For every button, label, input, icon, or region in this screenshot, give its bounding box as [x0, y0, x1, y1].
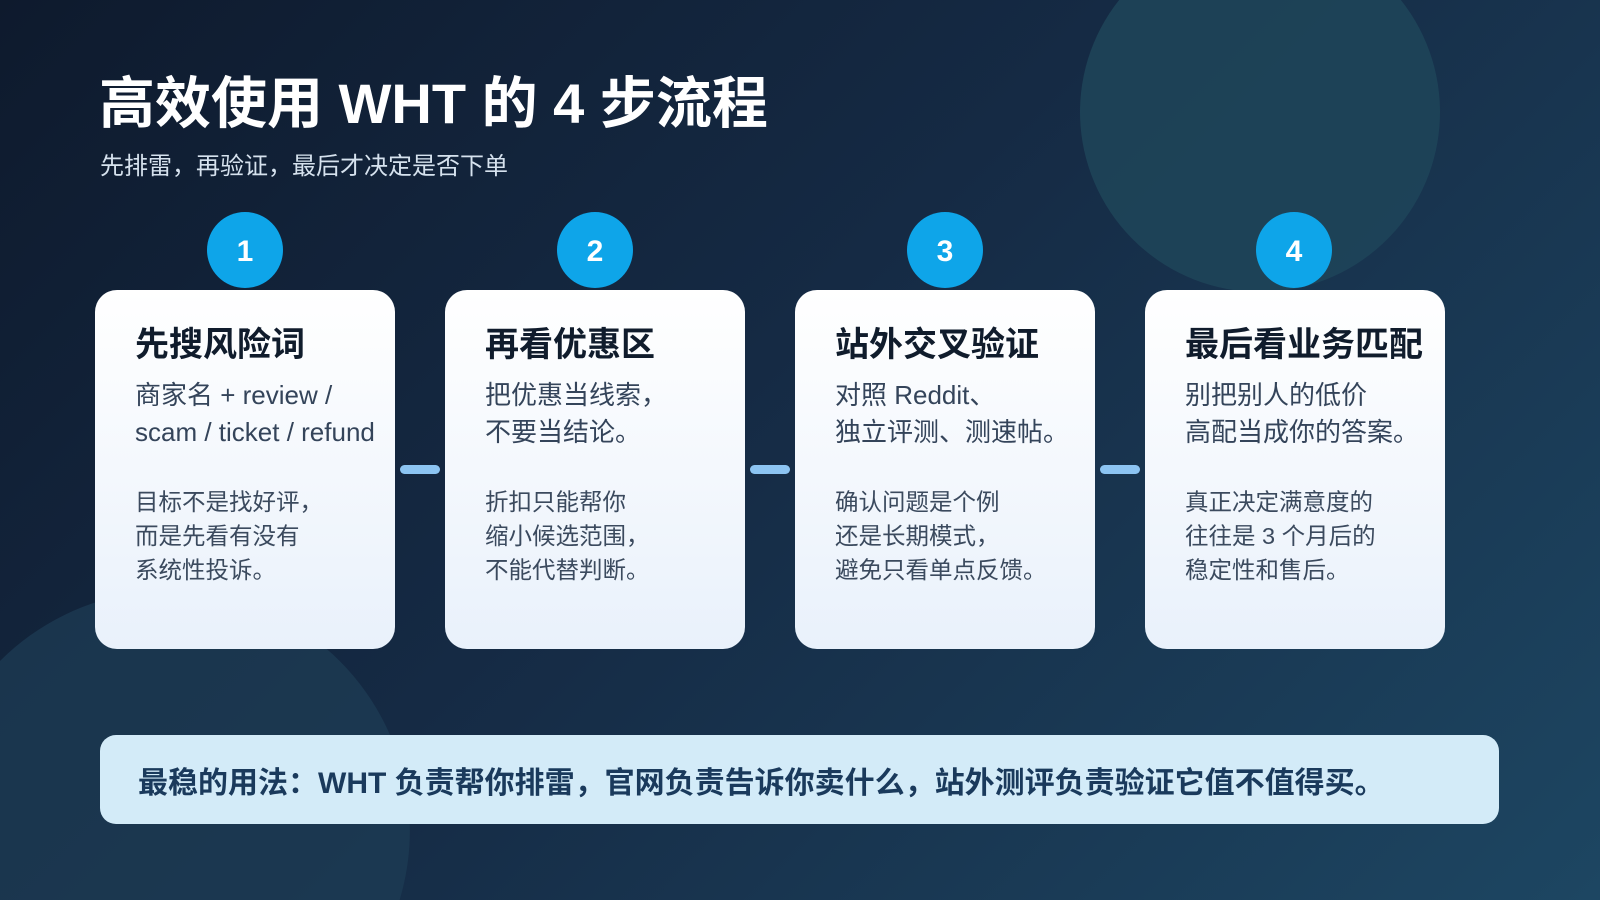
panel: step 1: 目标不是找好评，	[135, 489, 323, 515]
panel: step 2: 折扣只能帮你	[485, 489, 626, 515]
panel: step 1	[95, 290, 395, 649]
panel: step 1: 系统性投诉。	[135, 557, 276, 583]
panel: step 2: 缩小候选范围，	[485, 523, 650, 549]
panel: step 2: 不要当结论。	[485, 417, 641, 447]
badge 1	[207, 212, 283, 288]
badge 4	[1256, 212, 1332, 288]
panel: step 3: 站外交叉验证	[835, 326, 1039, 364]
panel: step 1: 商家名 + review /	[135, 380, 332, 410]
panel: step 4	[1145, 290, 1445, 649]
panel: step 4: 高配当成你的答案。	[1185, 417, 1419, 447]
panel: step 1: scam / ticket / refund	[135, 417, 375, 447]
panel: step 3: 还是长期模式，	[835, 523, 1000, 549]
panel: step 2: 再看优惠区	[485, 326, 655, 364]
panel: step 4: 往往是 3 个月后的	[1185, 523, 1376, 549]
badge 2	[557, 212, 633, 288]
panel: step 1: 而是先看有没有	[135, 523, 300, 549]
arrow: connector 1	[400, 465, 440, 474]
panel: step 4: 最后看业务匹配	[1185, 326, 1423, 364]
arrow: connector 3	[1100, 465, 1140, 474]
panel: step 3: 对照 Reddit、	[835, 380, 995, 410]
badge 3: 3	[937, 234, 953, 268]
panel: step 3: 独立评测、测速帖。	[835, 417, 1069, 447]
panel: step 3: 确认问题是个例	[835, 489, 1000, 515]
panel: step 2	[445, 290, 745, 649]
subtitle: 先排雷，再验证，最后才决定是否下单	[100, 153, 508, 180]
badge 1: 1	[237, 234, 253, 268]
panel: step 2: 不能代替判断。	[485, 557, 650, 583]
panel: step 2: 把优惠当线索，	[485, 380, 667, 410]
panel: step 4: 真正决定满意度的	[1185, 489, 1373, 515]
callout: bottom summary	[100, 735, 1499, 824]
badge 3	[907, 212, 983, 288]
callout: bottom summary: 最稳的用法：WHT 负责帮你排雷，官网负责告诉你卖什么，站外测评负责验证它值不值得买。	[138, 766, 1385, 800]
title: 高效使用 WHT 的 4 步流程	[99, 72, 768, 135]
badge 4: 4	[1286, 234, 1302, 268]
panel: step 3: 避免只看单点反馈。	[835, 557, 1046, 583]
panel: step 4: 稳定性和售后。	[1185, 557, 1350, 583]
panel: step 1: 先搜风险词	[135, 326, 305, 364]
badge 2: 2	[587, 234, 603, 268]
panel: step 4: 别把别人的低价	[1185, 380, 1367, 410]
panel: step 3	[795, 290, 1095, 649]
arrow: connector 2	[750, 465, 790, 474]
